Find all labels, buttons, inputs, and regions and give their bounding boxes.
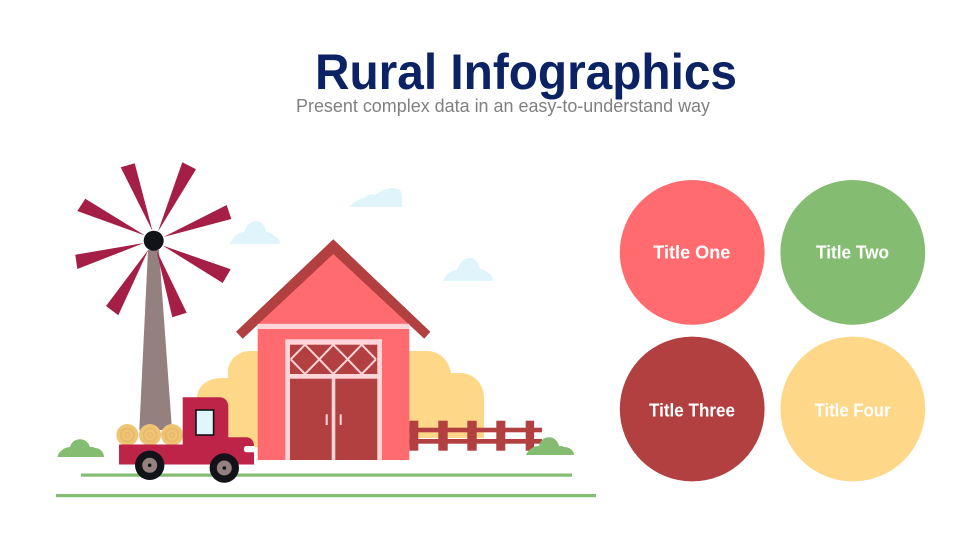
truck — [116, 397, 254, 483]
circle: title four — [780, 337, 925, 481]
wheel: front — [210, 453, 239, 483]
fence — [409, 421, 542, 451]
cloud: left — [230, 221, 280, 244]
circle: title three — [620, 337, 765, 481]
barn door: right — [335, 379, 377, 460]
truck body — [119, 397, 254, 464]
barn roof — [236, 239, 430, 339]
haystack: right — [409, 351, 484, 438]
wheel: rear — [135, 451, 164, 480]
windmill tower — [139, 250, 172, 430]
cloud: top — [349, 188, 402, 207]
bush: right green — [526, 437, 574, 455]
windmill — [75, 162, 231, 430]
truck window — [196, 410, 214, 435]
truck bumper notch — [244, 446, 254, 452]
barn body — [258, 329, 409, 460]
door handles — [326, 414, 342, 425]
ground line: upper — [81, 474, 572, 477]
windmill blades — [75, 162, 231, 317]
lattice window — [290, 345, 377, 374]
circle: title one: Title One — [653, 242, 730, 263]
barn gable — [258, 250, 409, 330]
barn — [236, 239, 430, 460]
ground line: lower — [56, 494, 596, 497]
circle: title four: Title Four — [814, 400, 890, 421]
barn door: left — [290, 379, 332, 460]
hay bales — [116, 424, 183, 446]
circle: title two — [780, 180, 925, 325]
subtitle: Present complex data in an easy-to-understand way — [296, 95, 711, 116]
door frame — [285, 339, 382, 460]
barn trim — [258, 324, 409, 329]
windmill hub — [144, 231, 164, 251]
cloud: right — [443, 258, 493, 281]
circle: title one — [620, 180, 765, 325]
bush: left green — [57, 439, 104, 457]
haystack: left — [197, 351, 258, 447]
title: Rural Infographics — [315, 44, 737, 100]
circle: title three: Title Three — [649, 400, 735, 421]
farm illustration — [56, 162, 596, 497]
circle: title two: Title Two — [816, 242, 889, 263]
